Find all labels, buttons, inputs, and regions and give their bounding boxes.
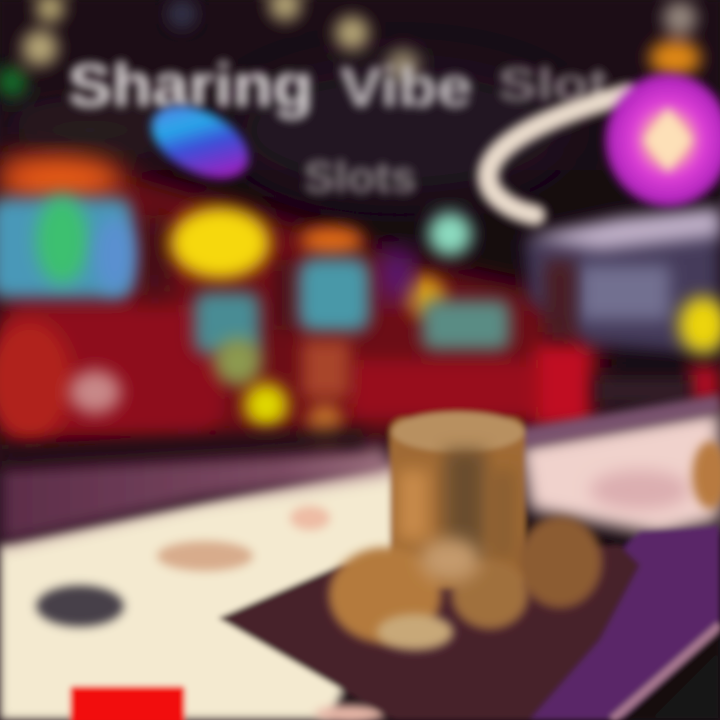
title: Slots	[304, 153, 416, 202]
right side grey-purple hall	[525, 208, 720, 407]
title	[68, 52, 608, 202]
chip stack	[329, 412, 602, 650]
table top	[0, 395, 720, 720]
red machine wall	[0, 150, 720, 450]
slot machine screens	[0, 156, 510, 447]
rainbow light	[140, 91, 260, 193]
neon sign	[606, 74, 720, 206]
title: Vibe	[340, 55, 472, 118]
title: Sharing	[68, 52, 313, 119]
title: Slot	[498, 58, 608, 110]
ceiling lights	[0, 0, 701, 97]
purple felt mat	[218, 525, 720, 720]
table markings	[36, 506, 385, 720]
neon sign ring	[488, 94, 628, 215]
